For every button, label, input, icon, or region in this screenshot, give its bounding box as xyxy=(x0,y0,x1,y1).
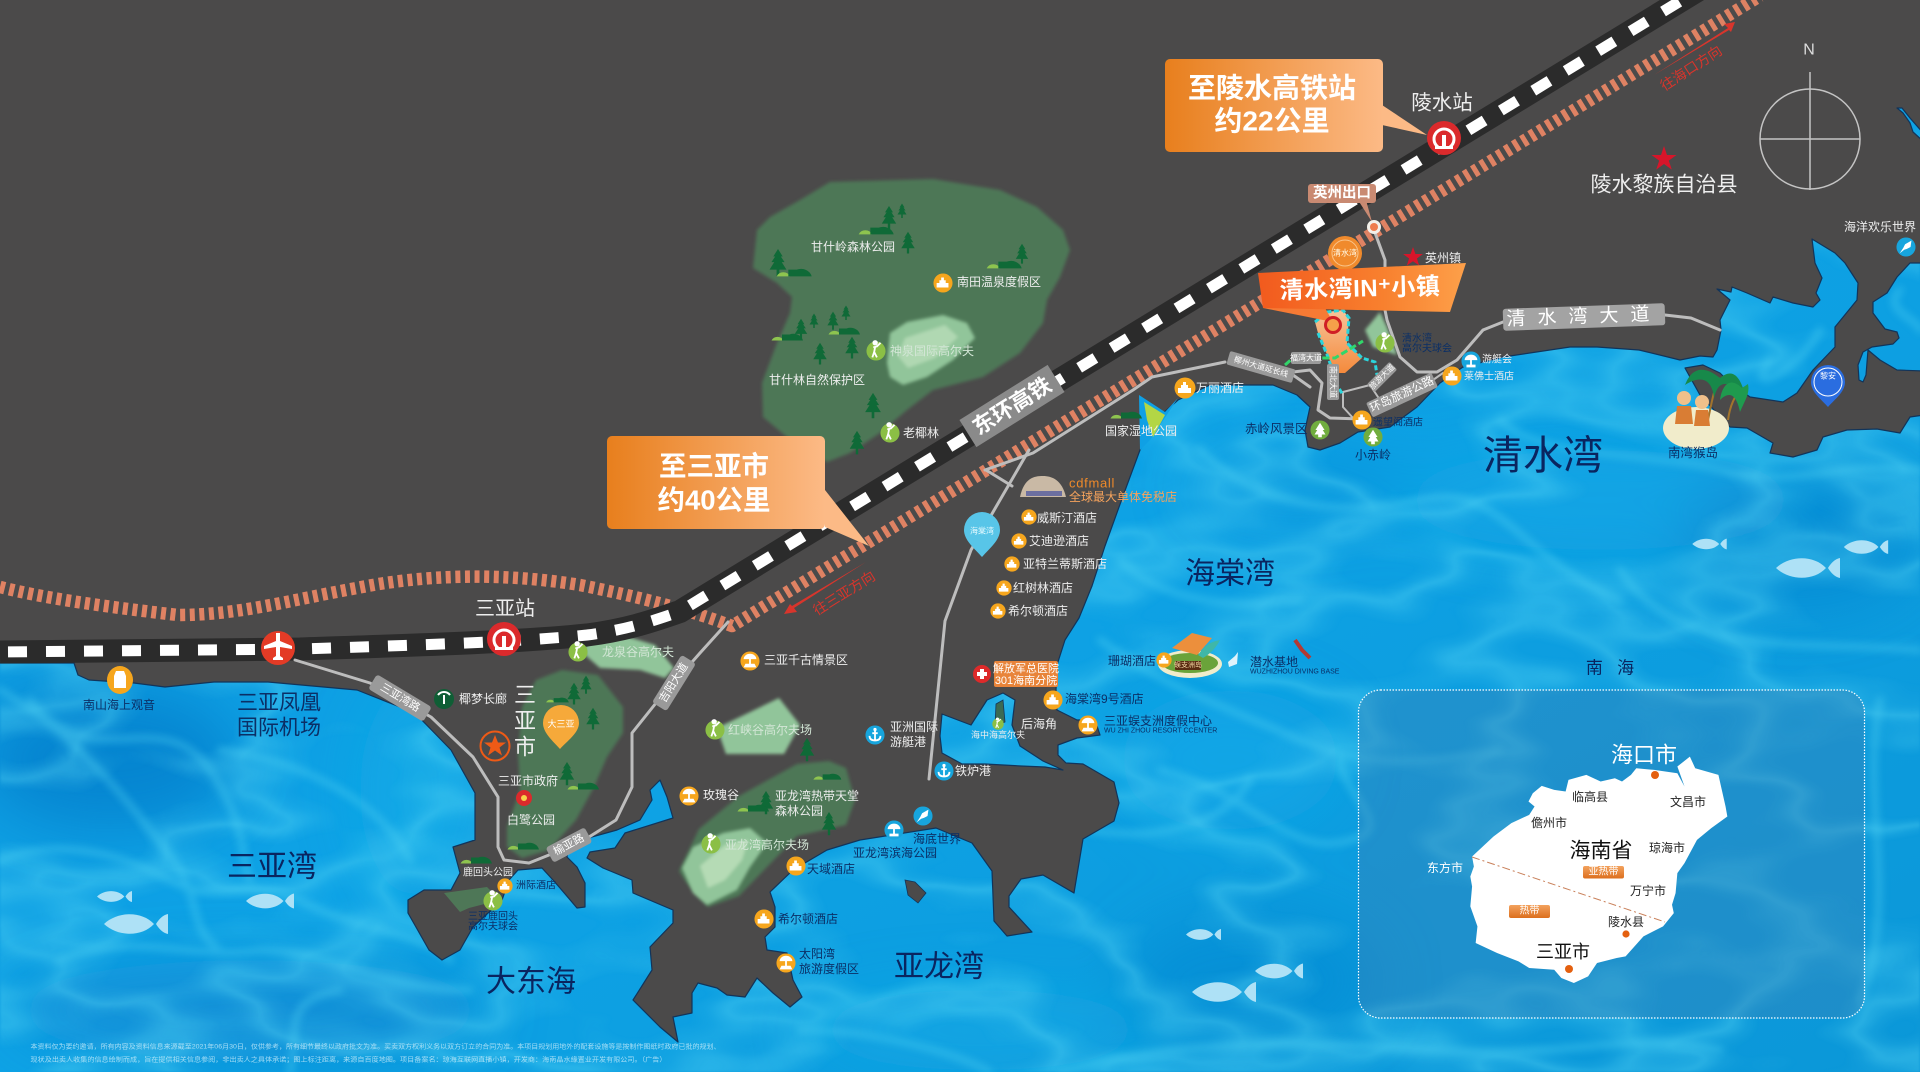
golf course: 神泉 xyxy=(887,315,975,385)
POI: central: 红峡谷高尔夫场 xyxy=(728,722,812,737)
trees and hills xyxy=(460,204,1028,864)
compass: N xyxy=(1803,42,1815,58)
蜈支洲岛: 蜈支洲岛 xyxy=(1174,660,1202,669)
islets xyxy=(905,700,1005,903)
英州镇 xyxy=(1403,247,1461,266)
disclaimer xyxy=(30,1042,720,1064)
清水湾 round badge: 清水湾 xyxy=(1333,248,1357,258)
disclaimer: 本资料仅为要约邀请，所有内容及资料信息来源截至2021年06月30日，仅供参考，所有细节最终以政府批文为准。买卖双方权利义务以双方订立的合同为准。本项目规划用地外的配套设施等是按制作图纸时政府已批的规划、 xyxy=(30,1042,720,1050)
inset panel: Hainan locator: 琼海市 xyxy=(1649,840,1685,855)
POI: central: 海中海高尔夫 xyxy=(971,729,1025,740)
POI: 三亚: 三 xyxy=(514,682,536,708)
airport icon xyxy=(261,631,295,665)
sea label: 南海: 南 海 xyxy=(1586,658,1634,678)
sea labels xyxy=(227,434,1603,998)
station: 三亚站 xyxy=(475,597,535,656)
inset panel: Hainan locator: 海南省 xyxy=(1570,840,1632,862)
POI: 甘什岭 labels: 南田温泉度假区 xyxy=(957,274,1041,289)
POI: cdfmall: 全球最大单体免税店 xyxy=(1069,489,1177,504)
project ribbon: 清水湾IN+小镇 xyxy=(1258,263,1466,322)
forest: 甘什岭 xyxy=(753,179,1070,462)
road plates near project: 福湾大道 xyxy=(1290,352,1322,362)
Sanya road plates: 吉阳大道 xyxy=(656,660,691,705)
POI: 甘什岭 labels: 老椰林 xyxy=(903,425,939,440)
POI: 三亚: 市 xyxy=(514,734,536,760)
golf course: 龙泉谷 xyxy=(585,636,674,678)
POI: central: 龙泉谷高尔夫 xyxy=(602,644,674,659)
hatched expressway xyxy=(0,0,1760,626)
POI: 甘什岭 labels: 神泉国际高尔夫 xyxy=(890,343,974,358)
pin: 黎安: 黎安 xyxy=(1820,370,1836,380)
POI: 亚龙湾: 旅游度假区 xyxy=(799,961,859,976)
POI: central: 三亚蜈支洲度假中心 xyxy=(1104,713,1212,728)
英州出口 exit: 英州出口 xyxy=(1313,184,1371,202)
POI: cdfmall: cdfmall xyxy=(1069,476,1115,490)
station: 陵水站: 陵水站 xyxy=(1411,92,1473,114)
road plates near project: 旅游大道 xyxy=(1367,362,1396,391)
airport label: 国际机场 xyxy=(237,716,321,740)
POI: 清水湾: 遥望阁酒店 xyxy=(1373,416,1423,428)
POI: 清水湾: 游艇会 xyxy=(1482,352,1512,366)
inset panel: Hainan locator: 亚热带 xyxy=(1588,864,1618,878)
POI: 亚龙湾: 希尔顿酒店 xyxy=(778,911,838,926)
陵水黎族自治县 xyxy=(1590,146,1738,196)
pin: 黎安 xyxy=(1811,365,1845,407)
inset panel: Hainan locator: 文昌市 xyxy=(1670,794,1706,809)
POI: central xyxy=(568,642,1217,781)
POI: 亚龙湾: 玫瑰谷 xyxy=(703,787,739,802)
pin: 海棠湾: 海棠湾 xyxy=(970,526,994,536)
road network xyxy=(295,230,1720,863)
东环高铁 plate xyxy=(959,365,1065,447)
direction arrow: 往海口方向: 往海口方向 xyxy=(1657,42,1725,94)
POI: 三亚: 高尔夫球会 xyxy=(468,920,518,932)
sea labels: 大东海 xyxy=(486,966,576,998)
POI: central: 解放军总医院 xyxy=(993,661,1059,675)
陵水黎族自治县: 陵水黎族自治县 xyxy=(1590,174,1738,196)
forest: 鹿回头 xyxy=(444,887,500,912)
callout: 至三亚市: 至三亚市 xyxy=(659,450,769,482)
POI: 甘什岭 labels: 甘什岭森林公园 xyxy=(811,239,895,254)
POI: central: 301海南分院 xyxy=(995,673,1057,687)
POI: cdfmall xyxy=(1020,476,1177,504)
清水湾 round badge xyxy=(1328,236,1362,270)
海洋欢乐世界: 海洋欢乐世界 xyxy=(1844,219,1916,234)
inset panel: Hainan locator: 三亚市 xyxy=(1536,942,1590,962)
POI: 三亚 xyxy=(83,666,579,932)
POI: 三亚: 洲际酒店 xyxy=(516,878,556,892)
road plates near project xyxy=(1226,351,1438,417)
POI: 海棠湾 hotels: 艾迪逊酒店 xyxy=(1029,534,1089,548)
POI: central: 铁炉港 xyxy=(955,764,991,778)
潜水基地: WUZHIZHOU DIVING BASE xyxy=(1250,668,1340,676)
POI: 海棠湾 hotels: 希尔顿酒店 xyxy=(1008,603,1068,618)
golf course: 红峡谷 xyxy=(717,698,800,754)
POI: 三亚: 鹿回头公园 xyxy=(463,866,513,878)
POI: 亚龙湾: 亚龙湾热带天堂 xyxy=(775,788,859,803)
road plates near project: 椰州大道延长线 xyxy=(1233,354,1289,379)
callout: 至三亚市: 约40公里 xyxy=(657,484,771,516)
sea labels: 三亚湾 xyxy=(227,850,317,884)
inset panel: Hainan locator: 热带 xyxy=(1520,904,1540,916)
POI: 清水湾 xyxy=(1105,332,1514,462)
golf course: 亚龙湾 xyxy=(682,828,767,905)
Sanya road plates: 榆亚路 xyxy=(551,830,586,858)
蜈支洲岛: 珊瑚酒店 xyxy=(1108,653,1156,668)
direction arrow: 往海口方向 xyxy=(1654,22,1735,94)
POI: 三亚: 三亚市政府 xyxy=(498,773,558,788)
POI: 亚龙湾 xyxy=(679,786,961,976)
POI: 清水湾: 赤岭风景区 xyxy=(1245,422,1308,436)
POI: 海棠湾 hotels xyxy=(990,509,1107,619)
sea labels: 清水湾 xyxy=(1483,434,1603,478)
东环高铁 plate: 东环高铁 xyxy=(968,372,1056,440)
POI: 亚龙湾: 亚龙湾滨海公园 xyxy=(853,845,937,860)
POI: 清水湾: 莱佛士酒店 xyxy=(1464,370,1514,382)
英州镇: 英州镇 xyxy=(1425,251,1461,265)
inset panel: Hainan locator: 东方市 xyxy=(1427,860,1463,875)
POI: 海棠湾 hotels: 红树林酒店 xyxy=(1013,580,1073,595)
POI: 甘什岭 labels: 甘什林自然保护区 xyxy=(769,372,865,387)
POI: central: 亚洲国际 xyxy=(890,720,938,734)
POI: 三亚: 椰梦长廊 xyxy=(459,691,507,706)
callout: 至三亚市 xyxy=(607,436,869,546)
Hainan island xyxy=(1470,757,1727,983)
POI: 海棠湾 hotels: 威斯汀酒店 xyxy=(1037,511,1097,525)
潜水基地 xyxy=(1228,640,1340,676)
POI: 亚龙湾: 森林公园 xyxy=(775,803,823,818)
POI: 亚龙湾: 太阳湾 xyxy=(799,946,835,961)
forest: 三亚市 xyxy=(507,670,623,858)
direction arrow: 往三亚方向: 往三亚方向 xyxy=(810,568,878,618)
callout: 至陵水高铁站: 至陵水高铁站 xyxy=(1188,72,1356,104)
POI: central: WU ZHI ZHOU RESORT CCENTER xyxy=(1104,728,1217,734)
南湾猴岛 xyxy=(1663,370,1748,460)
inset panel: Hainan locator: 陵水县 xyxy=(1608,915,1644,929)
POI: 三亚: 大三亚 xyxy=(547,718,575,729)
project marker xyxy=(1326,318,1340,332)
POI: central: 海棠湾9号酒店 xyxy=(1065,691,1144,706)
英州出口 exit xyxy=(1308,184,1381,234)
POI: 亚龙湾: 海底世界 xyxy=(913,831,961,846)
海洋欢乐世界 xyxy=(1844,219,1916,257)
POI: 亚龙湾: 亚龙湾高尔夫场 xyxy=(725,837,809,852)
Sanya road plates xyxy=(368,655,696,863)
callout: 至陵水高铁站 xyxy=(1165,59,1427,152)
station: 三亚站: 三亚站 xyxy=(475,597,535,620)
POI: central: 后海角 xyxy=(1021,716,1057,731)
station: 陵水站 xyxy=(1411,92,1473,155)
direction arrow: 往三亚方向 xyxy=(784,562,878,618)
POI: 海棠湾 hotels: 亚特兰蒂斯酒店 xyxy=(1023,556,1107,571)
inset panel: Hainan locator xyxy=(1358,690,1864,1018)
project site boundary xyxy=(1285,310,1377,395)
POI: 清水湾: 清水湾 xyxy=(1402,332,1432,344)
POI: 亚龙湾: 天域酒店 xyxy=(807,862,855,876)
潜水基地: 潜水基地 xyxy=(1250,655,1298,669)
南湾猴岛: 南湾猴岛 xyxy=(1668,445,1718,460)
POI: 甘什岭 labels xyxy=(769,239,1041,443)
POI: 三亚: 亚 xyxy=(514,708,536,734)
wetland xyxy=(1110,395,1178,450)
airport label xyxy=(237,692,321,740)
POI: 三亚: 三亚鹿回头 xyxy=(468,910,518,922)
POI: 三亚: 白鹭公园 xyxy=(507,812,555,827)
sea labels: 亚龙湾 xyxy=(894,950,984,984)
清水湾大道 plate: 清水湾大道 xyxy=(1506,303,1662,330)
POI: central: 游艇港 xyxy=(890,735,926,749)
compass xyxy=(1760,42,1860,190)
inset panel: Hainan locator: 万宁市 xyxy=(1630,883,1666,898)
callout: 至陵水高铁站: 约22公里 xyxy=(1214,106,1330,136)
POI: 清水湾: 国家湿地公园 xyxy=(1105,423,1177,438)
pin: 海棠湾 xyxy=(964,512,1000,557)
inset panel: Hainan locator: 临高县 xyxy=(1572,789,1608,804)
airport label: 三亚凤凰 xyxy=(237,692,321,714)
Sanya road plates: 三亚湾路 xyxy=(378,680,423,714)
POI: 三亚: 南山海上观音 xyxy=(83,697,155,712)
road plates near project: 环岛旅游公路 xyxy=(1367,373,1436,415)
inset panel: Hainan locator: 儋州市 xyxy=(1531,815,1567,830)
sea labels: 海棠湾 xyxy=(1185,558,1275,590)
东环高铁 railway xyxy=(0,0,1700,652)
POI: 清水湾: 小赤岭 xyxy=(1355,448,1391,462)
golf course: 清水湾 xyxy=(1365,312,1397,355)
inset panel: Hainan locator: 海口市 xyxy=(1611,742,1677,768)
fish xyxy=(97,539,1888,1002)
forest: 亚龙湾 xyxy=(679,761,855,907)
POI: 清水湾: 万丽酒店 xyxy=(1196,381,1244,395)
POI: central: 三亚千古情景区 xyxy=(764,652,848,667)
road plates near project: 南北大道 xyxy=(1328,366,1338,398)
disclaimer: 现状及出卖人收集的信息绘制而成，旨在提供相关信息参阅，非出卖人之具体承诺；图上标注距离，来源自百度地图。项目备案名：琼海互联网直播小镇，开发商：海南晶水缘置业开发有限公司。（广告） xyxy=(30,1054,666,1064)
project ribbon: 清水湾IN+小镇: 清水湾IN⁺小镇 xyxy=(1279,272,1441,305)
POI: 清水湾: 高尔夫球会 xyxy=(1402,342,1452,354)
蜈支洲岛 xyxy=(1108,633,1222,678)
